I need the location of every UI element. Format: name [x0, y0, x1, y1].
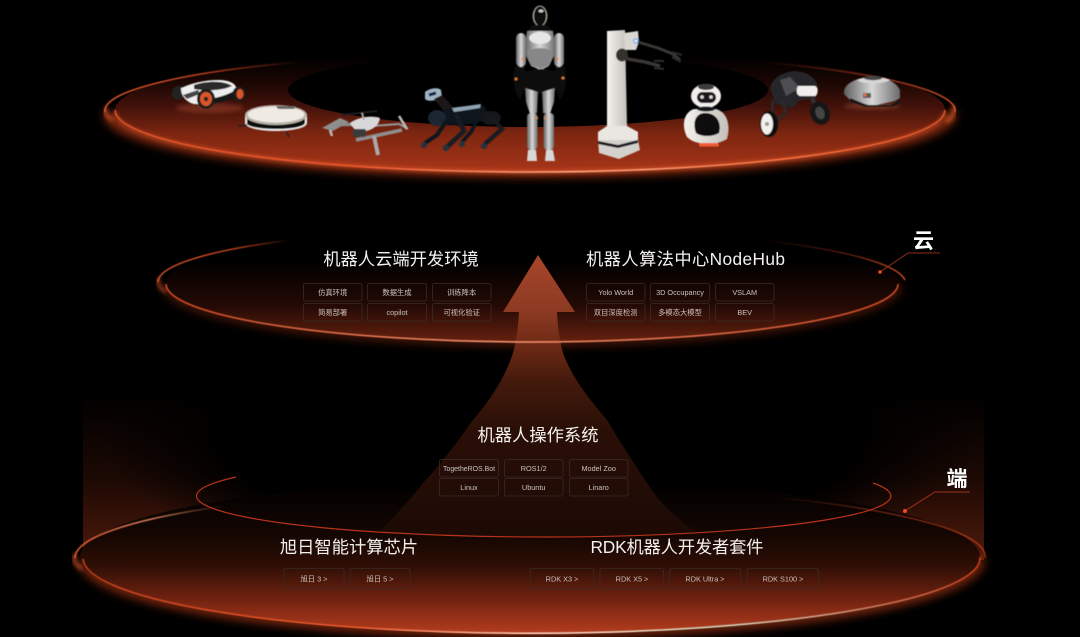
robot: drone: [322, 111, 408, 155]
panel: RDK robot developer kits: [530, 537, 818, 588]
tags: 双目深度检测: [594, 308, 638, 317]
tags: Linaro: [589, 483, 609, 492]
tags: Yolo World: [598, 288, 633, 297]
label: edge tier: [903, 468, 970, 513]
tags: 3D Occupancy: [656, 288, 704, 297]
robot: wheeled legged: [760, 71, 833, 137]
heading: 机器人操作系统: [478, 425, 598, 445]
robot: vacuum: [238, 105, 307, 137]
platform: top robot ring: [105, 48, 955, 172]
tags: 旭日 3 >: [301, 574, 327, 584]
background glow column: [83, 380, 984, 560]
tags: [284, 568, 410, 588]
label: cloud tier: [878, 230, 940, 274]
robot: humanoid: [513, 6, 566, 161]
tags: copilot: [386, 308, 408, 317]
tags: RDK S100 >: [763, 574, 803, 584]
tags: 训练降本: [447, 288, 477, 297]
tags: 仿真环境: [318, 288, 347, 297]
label: edge tier: 端: [946, 468, 968, 491]
tags: 简易部署: [318, 308, 347, 317]
panel: robot cloud development environment: [304, 249, 491, 321]
robot: delivery box: [844, 76, 900, 110]
tags: [530, 568, 818, 588]
central upward arrow: [380, 255, 695, 536]
panel: robot algorithm center NodeHub: [586, 249, 785, 321]
tags: 多模态大模型: [658, 308, 702, 317]
middle ring front rim: [158, 278, 898, 342]
tags: BEV: [737, 308, 752, 317]
tags: Linux: [460, 483, 478, 492]
heading: 旭日智能计算芯片: [280, 537, 418, 557]
tags: 数据生成: [382, 288, 412, 297]
platform: lower thin ring: [196, 477, 891, 537]
platform: bottom device ring: [74, 480, 985, 634]
tags: Ubuntu: [522, 483, 545, 492]
robot: arm pillar: [598, 30, 682, 159]
heading: 机器人云端开发环境: [323, 249, 479, 269]
tags: RDK X5 >: [616, 574, 648, 584]
tags: [304, 284, 491, 321]
tags: RDK X3 >: [546, 574, 578, 584]
robot: quadruped dog: [421, 88, 502, 151]
panel: robot operating system: [440, 425, 628, 496]
heading: RDK机器人开发者套件: [590, 537, 764, 557]
robot: round companion: [684, 84, 729, 146]
platform: middle cloud ring: [158, 222, 905, 342]
tags: [586, 284, 774, 321]
heading: 机器人算法中心NodeHub: [586, 249, 785, 269]
tags: RDK Ultra >: [685, 574, 725, 584]
panel: sunrise computing chips: [280, 537, 418, 588]
tags: TogetheROS.Bot: [443, 464, 495, 473]
tags: Model Zoo: [581, 464, 616, 473]
tags: ROS1/2: [521, 464, 547, 473]
tags: 可视化验证: [443, 308, 481, 317]
tags: VSLAM: [732, 288, 757, 297]
robot: lawn mower: [172, 80, 246, 113]
label: cloud tier: 云: [913, 230, 934, 253]
tags: 旭日 5 >: [367, 574, 393, 584]
tags: [440, 460, 628, 496]
